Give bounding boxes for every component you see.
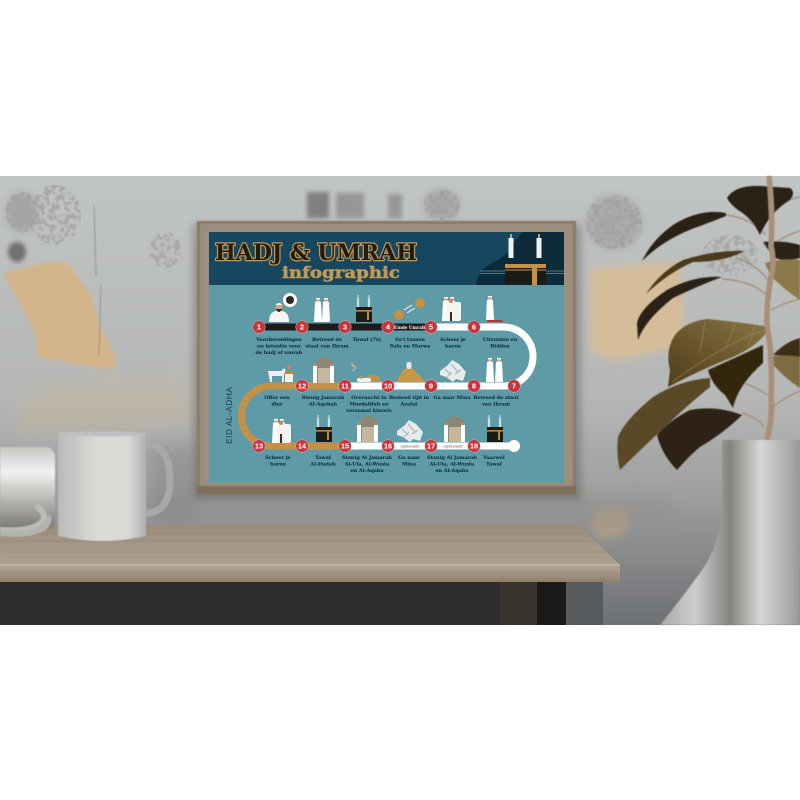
table (0, 525, 620, 625)
step numbers: 6 (472, 323, 476, 332)
step numbers: 3 (343, 323, 347, 332)
step labels: haren (270, 462, 286, 468)
cup and saucer (0, 447, 55, 537)
step labels: Tawaf (315, 455, 332, 461)
step labels: Safa en Marwa (390, 344, 431, 350)
step labels: Sa'i tussen (395, 337, 425, 343)
label: optional 1: (optioneel) (401, 444, 420, 448)
header band (209, 232, 564, 285)
step numbers: 11 (341, 382, 349, 391)
step numbers: 15 (341, 442, 349, 451)
icon: intention, man with speech bubble (269, 293, 297, 322)
step labels: Scheer je (440, 337, 466, 343)
title: HADJ & UMRAH (215, 240, 417, 266)
step numbers: 8 (472, 382, 476, 391)
icon: haircut 1 (442, 297, 461, 321)
step labels: Scheer je (265, 455, 291, 461)
mug (58, 432, 170, 541)
icon: haircut 2 (272, 419, 291, 443)
icon: sa'i (394, 298, 425, 320)
step labels: Vaarwel (482, 455, 505, 461)
frame shadow (193, 224, 581, 500)
step numbers: 10 (384, 382, 392, 391)
icon: animal sacrifice (268, 365, 293, 382)
step numbers: 1 (257, 323, 261, 332)
plant (617, 176, 800, 470)
label: end of Umrah (393, 324, 426, 330)
step numbers: 18 (470, 442, 478, 451)
olive leaves (646, 251, 744, 294)
stem (767, 176, 773, 440)
route end marker (508, 440, 520, 452)
step numbers (253, 321, 520, 452)
step labels: Muzdalifah en (349, 402, 389, 408)
step labels: Overnacht in (351, 395, 387, 401)
side label: EID AL-ADHA (224, 387, 234, 444)
step labels: Al-Ula, Al-Wusta (429, 462, 475, 468)
step labels: verzamel kiezels (345, 408, 392, 414)
step labels: Voorbereidingen (255, 337, 302, 343)
step labels: Al-Ifadah (309, 462, 336, 468)
step labels: en intentie voor (257, 344, 301, 350)
step labels: Betreed de (312, 337, 342, 343)
icon: rest (486, 296, 504, 322)
step labels: Arafat (399, 402, 418, 408)
step numbers: 17 (427, 442, 435, 451)
step numbers: 2 (300, 323, 304, 332)
subtitle: infographic (282, 263, 400, 282)
step labels: staat van Ihram (305, 344, 349, 350)
step labels: Stenig Jamarah (302, 395, 345, 401)
icon: Jamarah 12 (313, 357, 334, 383)
step labels: en Al-Aqaba (435, 468, 469, 474)
step labels: dier (272, 402, 283, 408)
step labels: Ga naar Mina (433, 395, 471, 401)
step labels: en Al-Aqaba (350, 468, 384, 474)
label: optional 2: (optioneel) (444, 444, 463, 448)
step labels: Stenig Al Jamarah (427, 455, 477, 461)
label: end of Umrah: Einde Umrah (394, 325, 425, 330)
step labels: van Ihram (481, 402, 511, 408)
background photo: wall (0, 176, 800, 625)
icon: Muzdalifah (351, 362, 381, 382)
step labels: de hadj of umrah (256, 350, 303, 356)
step labels: Offer een (264, 395, 290, 401)
icon: Jamarah 17 (444, 416, 465, 442)
step numbers: 7 (512, 382, 516, 391)
step labels (255, 336, 519, 474)
step labels: Al-Aqabah (308, 402, 338, 408)
icon: kaaba tawaf (356, 295, 372, 322)
dark leaves (637, 186, 800, 357)
icon: tents Mina 1 (440, 360, 466, 382)
step labels: Bidden (490, 344, 510, 350)
icon: ihram 2 (486, 358, 503, 382)
icon: tents Mina 2 (397, 420, 423, 442)
poster frame (197, 221, 576, 494)
step numbers: 13 (255, 442, 263, 451)
icon: farewell kaaba (487, 415, 503, 442)
icon: ihram 1 (314, 298, 330, 322)
step labels: haren (445, 344, 461, 350)
step labels: Tawaf (486, 462, 503, 468)
step numbers: 5 (429, 323, 433, 332)
step numbers: 16 (384, 442, 392, 451)
step labels: Ga naar (398, 455, 420, 461)
poster (209, 232, 564, 483)
step labels: Stenig Al Jamarah (342, 455, 392, 461)
step numbers: 9 (429, 382, 433, 391)
step numbers: 12 (298, 382, 306, 391)
icon: kaaba ifadah (316, 415, 332, 442)
step labels: Uitrusten en (483, 337, 518, 343)
route path (242, 327, 533, 446)
step labels: Tawaf (7x) (353, 336, 381, 343)
step numbers: 4 (386, 323, 391, 332)
step labels: Besteed tijd in (389, 395, 429, 401)
step labels: Mina (402, 462, 417, 468)
step numbers: 14 (298, 442, 307, 451)
step labels: Betreed de staat (473, 395, 519, 401)
icon: Jamarah 15 (357, 416, 378, 442)
icon: Arafat (396, 362, 426, 382)
step labels: Al-Ula, Al-Wusta (344, 462, 390, 468)
vase (660, 440, 800, 625)
